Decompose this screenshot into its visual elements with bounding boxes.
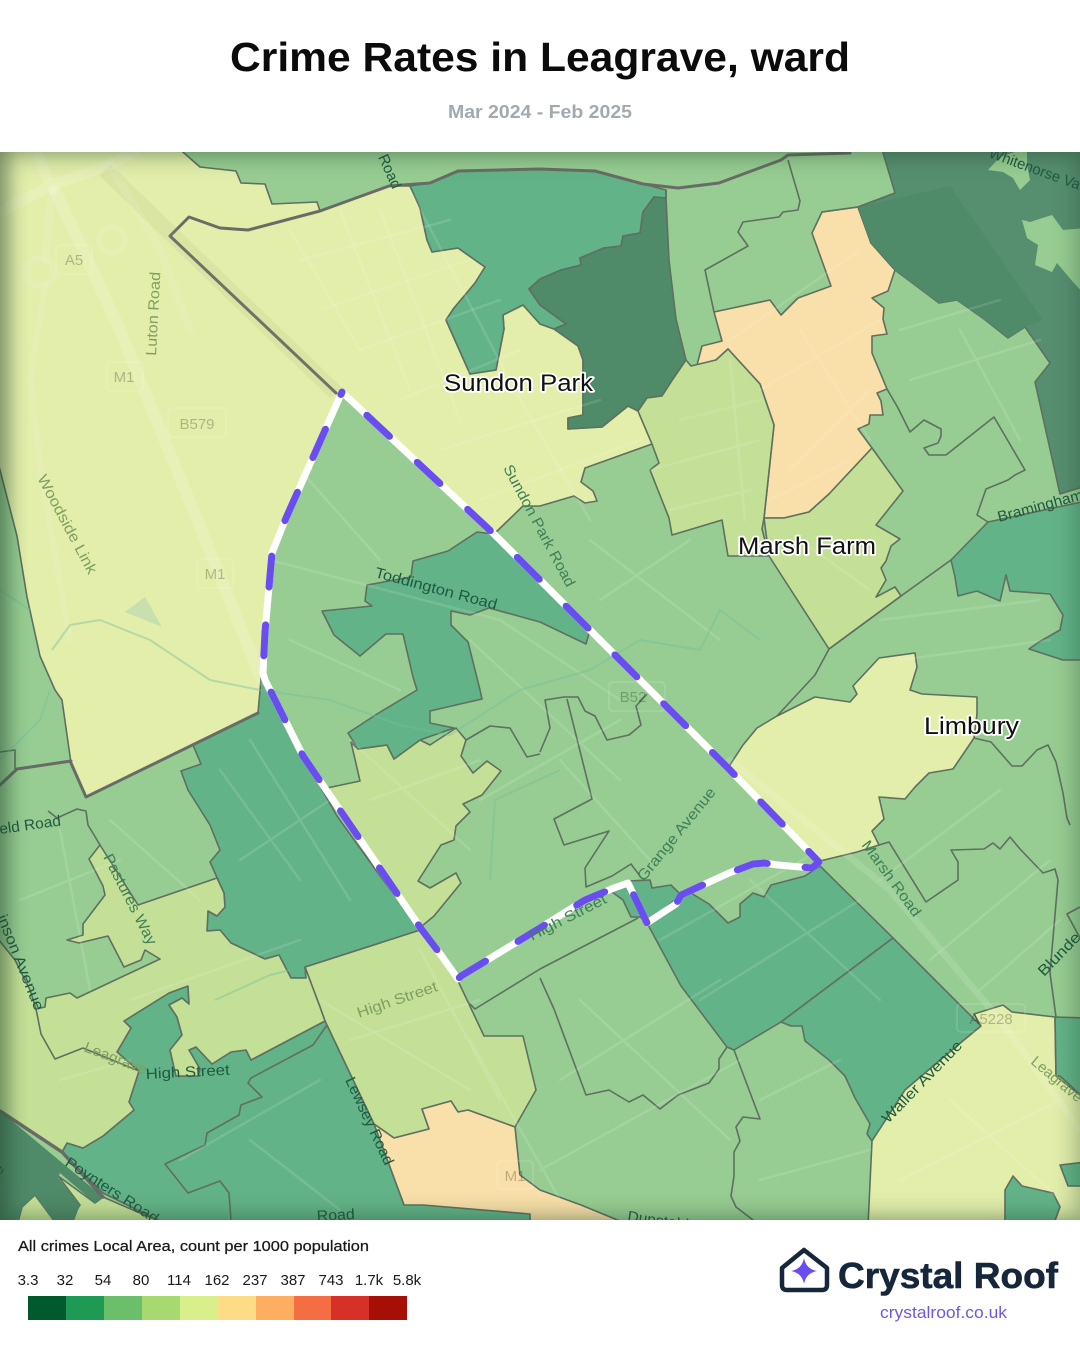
region: medium-dark Toddington Road inside ward — [322, 532, 590, 759]
legend scale values: 1.7k — [355, 1272, 384, 1289]
road names: Pastures Way — [99, 851, 160, 948]
place labels: Marsh Farm — [738, 533, 876, 560]
legend scale values: 54 — [95, 1272, 111, 1289]
legend scale values: 5.8k — [393, 1272, 422, 1289]
ward boundary: Leagrave dashed outline — [263, 392, 819, 979]
region: darkest green northeast core — [858, 186, 1043, 338]
region: light pocket right edge — [1022, 215, 1080, 296]
region: dark green northeast — [858, 146, 1080, 494]
website url: crystalroof.co.uk — [880, 1304, 1008, 1322]
region: medium-dark corner pocket — [1060, 1162, 1080, 1186]
place labels — [444, 370, 1019, 740]
thick road boundary — [0, 153, 850, 1197]
region: medium-dark right edge — [1055, 1017, 1080, 1100]
road names: Sundon Park Road — [499, 462, 578, 590]
road shields: B579 — [179, 416, 215, 433]
road shields: M1 — [505, 1168, 525, 1185]
region: medium-dark southeast pocket — [1005, 1176, 1060, 1226]
region: northwest and Sundon Park (light yellow) — [0, 146, 652, 797]
icon: house with star — [782, 1250, 827, 1290]
road shields: M1 — [205, 566, 225, 583]
region: small medium-dark patch on High Street — [612, 880, 681, 923]
road names: High Street — [145, 1062, 231, 1083]
boundary lines between areas — [0, 160, 1080, 1220]
road names: Bramingham — [996, 487, 1080, 526]
road names: Toddington Road — [373, 564, 499, 613]
road names: Lewsey Road — [341, 1075, 397, 1168]
road shields — [56, 245, 1025, 1189]
road names: High Street — [526, 890, 610, 945]
legend scale values: 162 — [204, 1272, 230, 1289]
road names: Waller Avenue — [879, 1037, 966, 1127]
legend scale values: 32 — [57, 1272, 73, 1289]
road names: Woodside Link — [33, 472, 100, 577]
legend title: All crimes Local Area, count per 1000 population — [18, 1239, 369, 1255]
region: yellow-green west of Marsh Farm — [638, 349, 774, 556]
region: light strip under Poynters Road — [58, 1176, 170, 1226]
road shields: A5 — [65, 252, 83, 269]
legend colour bar — [28, 1296, 407, 1320]
map base: medium green areas — [0, 152, 1080, 1220]
road names: Road — [374, 152, 405, 192]
region: medium-dark Bramingham — [951, 501, 1080, 660]
road shields: A5228 — [969, 1011, 1013, 1028]
logo: Crystal Roof — [780, 1248, 1059, 1322]
road names: Grange Avenue — [634, 784, 719, 885]
legend — [18, 1239, 422, 1320]
region: yellow-green Marsh Farm east — [764, 448, 903, 649]
region: medium-dark west of ward — [181, 668, 420, 978]
region: medium-dark southwest — [62, 986, 530, 1226]
road names: eld Road — [0, 812, 62, 838]
region: light yellow Limbury — [728, 653, 977, 861]
region: medium-dark south east of ward — [647, 866, 893, 1050]
legend scale values: 387 — [280, 1272, 306, 1289]
legend scale values — [18, 1272, 422, 1289]
region: yellow-green inside ward — [327, 728, 501, 926]
water courses — [0, 590, 760, 1000]
subtitle: date range: Mar 2024 - Feb 2025 — [448, 102, 632, 122]
legend scale values: 237 — [242, 1272, 268, 1289]
road names: Marsh Road — [858, 837, 924, 920]
region: peach south — [374, 1101, 632, 1226]
region: yellow-green Pastures Way and Leagrave — [0, 845, 325, 1152]
legend scale values: 114 — [167, 1272, 191, 1289]
region: dark green near Sundon Park — [529, 197, 686, 429]
legend scale values: 80 — [133, 1272, 149, 1289]
region: bottom left light wedge — [17, 1195, 58, 1226]
region: light yellow southeast — [868, 1005, 1080, 1226]
region: light pocket top right — [988, 148, 1030, 190]
title: Crime Rates in Leagrave, ward — [230, 34, 850, 80]
place labels: Sundon Park — [444, 370, 594, 397]
choropleth regions — [0, 146, 1080, 1226]
road names: Luton Road — [143, 271, 164, 356]
region: peach Marsh Farm north — [697, 207, 895, 518]
street network — [0, 152, 1080, 1210]
region: dark green Poynters Road corner — [0, 1106, 103, 1226]
road names: Blunde — [1035, 929, 1080, 980]
road shields: M1 — [114, 369, 134, 386]
road names: Leagrave — [82, 1039, 149, 1078]
region: medium-dark Waller Avenue — [781, 938, 981, 1141]
place labels: Limbury — [924, 713, 1019, 740]
region: north Sundon medium-dark green — [410, 169, 666, 374]
road shields: B52 — [620, 689, 646, 706]
wordmark: Crystal Roof — [838, 1255, 1059, 1296]
panel: choropleth map — [0, 152, 1080, 1220]
legend scale values: 743 — [318, 1272, 344, 1289]
road names: High Street — [355, 978, 441, 1022]
pond — [125, 597, 162, 627]
legend scale values: 3.3 — [18, 1272, 38, 1289]
region: yellow-green High Street — [305, 930, 536, 1138]
